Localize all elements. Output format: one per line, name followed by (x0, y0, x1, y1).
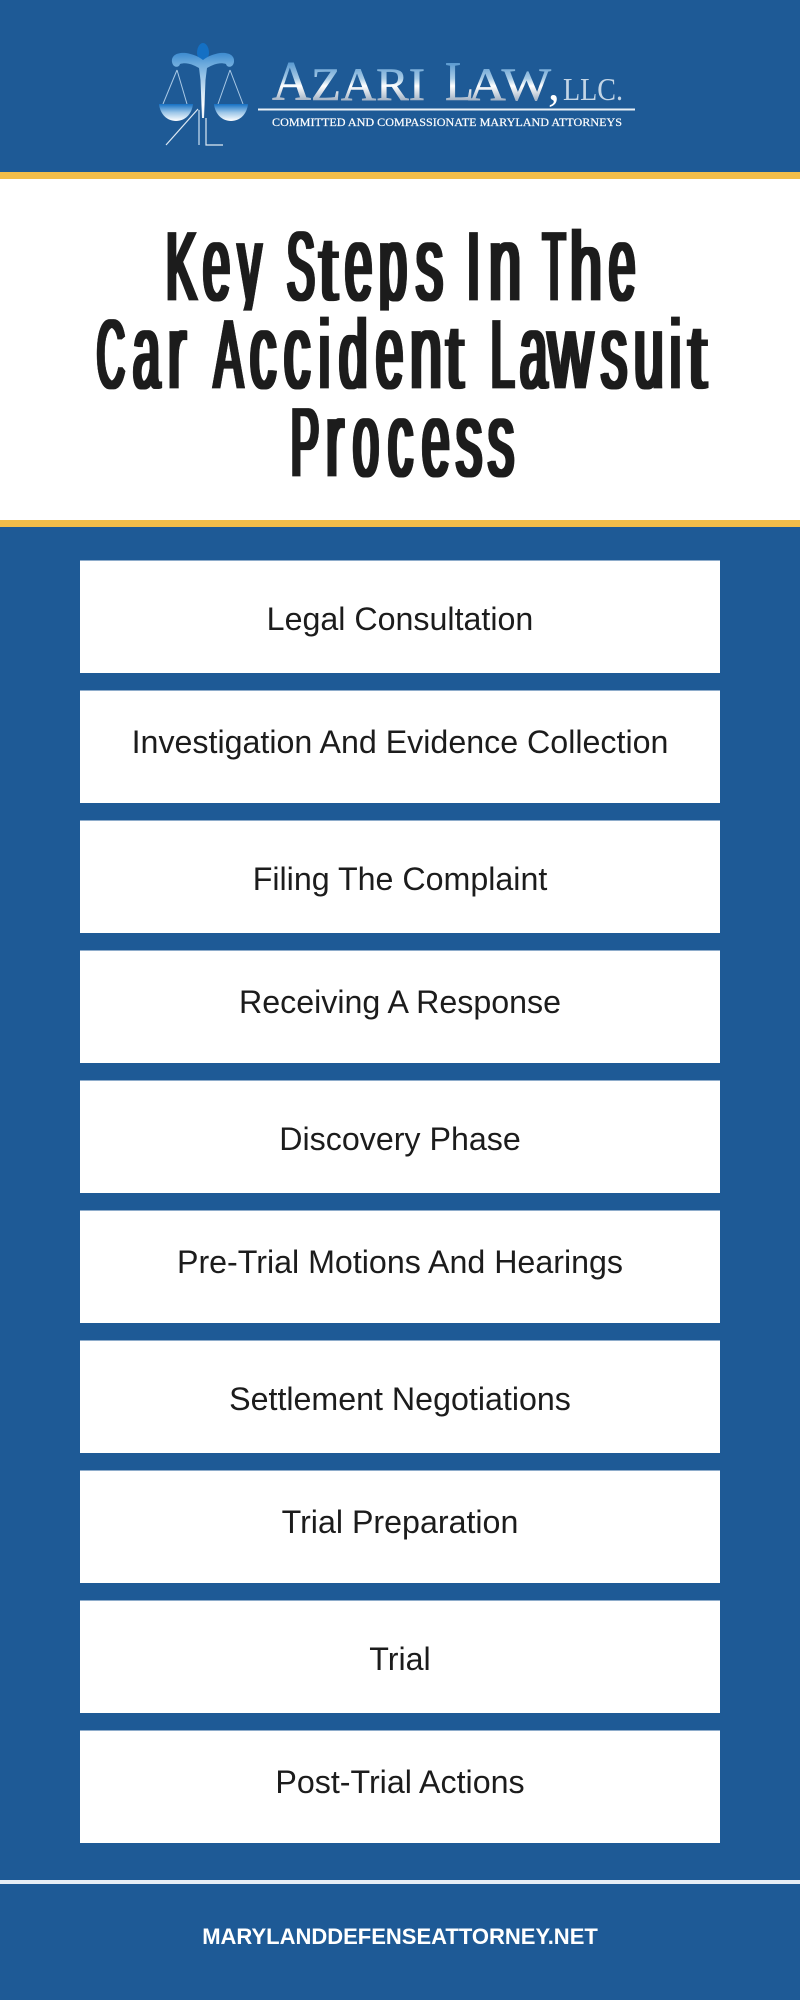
title text: e (609, 203, 635, 323)
step 8 (80, 1470, 720, 1583)
title text: e (345, 203, 372, 323)
title text: c (250, 291, 276, 411)
title text: e (376, 291, 403, 411)
title text: n (489, 203, 521, 323)
step 2: Investigation And Evidence Collection (132, 724, 668, 760)
step 6 (80, 1210, 720, 1323)
title text: C (97, 299, 125, 409)
title text: e (422, 379, 449, 499)
step 1: Legal Consultation (267, 601, 533, 637)
step 3: Filing The Complaint (253, 861, 547, 897)
step 7: Settlement Negotiations (229, 1381, 571, 1417)
title text: p (379, 203, 407, 323)
title text: y (238, 203, 261, 323)
title text: o (353, 379, 378, 499)
title text: e (203, 203, 230, 323)
logo wordmark: A (272, 51, 312, 113)
title text: t (446, 305, 464, 407)
title text: r (168, 291, 186, 411)
title text: t (319, 217, 338, 319)
step 3 (80, 820, 720, 933)
step 5: Discovery Phase (279, 1121, 521, 1157)
title text: a (133, 291, 160, 411)
step 5 (80, 1080, 720, 1193)
title text: s (601, 291, 627, 411)
title text: L (491, 299, 514, 409)
title text: S (287, 211, 315, 321)
logo tagline: COMMITTED AND COMPASSIONATE MARYLAND ATTORNEYS (272, 115, 622, 129)
title text: A (214, 299, 243, 409)
title text: t (688, 305, 707, 407)
step 6: Pre-Trial Motions And Hearings (177, 1244, 623, 1280)
step 8: Trial Preparation (282, 1504, 518, 1540)
title text: r (326, 379, 343, 499)
title text: s (488, 379, 514, 499)
title text: n (410, 291, 442, 411)
title text: d (339, 299, 367, 409)
step 1 (80, 560, 720, 673)
logo wordmark: LLC. (563, 71, 623, 107)
title text: u (634, 291, 664, 411)
step 7 (80, 1340, 720, 1453)
step 10 (80, 1730, 720, 1843)
title text: i (319, 299, 330, 409)
title text: T (543, 211, 565, 321)
title text: s (416, 203, 443, 323)
title text: i (670, 299, 681, 409)
step 10: Post-Trial Actions (275, 1764, 525, 1800)
step 9 (80, 1600, 720, 1713)
title text: h (570, 211, 602, 321)
title text: K (166, 211, 197, 321)
title text: c (388, 379, 413, 499)
logo wordmark: ZARI (311, 59, 425, 111)
header logo: Azari Law, LLC (159, 43, 635, 146)
step 2 (80, 690, 720, 803)
title text: I (466, 211, 479, 321)
title text: P (291, 387, 319, 497)
logo wordmark: L (445, 51, 474, 113)
title text: a (520, 291, 547, 411)
logo wordmark: AW (468, 59, 552, 111)
title text: s (456, 379, 482, 499)
logo wordmark (272, 51, 623, 113)
logo wordmark: , (548, 59, 560, 111)
step 9: Trial (369, 1641, 431, 1677)
icon: scales of justice (159, 43, 248, 145)
title text (96, 203, 708, 499)
step 4: Receiving A Response (239, 984, 561, 1020)
step 4 (80, 950, 720, 1063)
title text: c (284, 291, 310, 411)
title panel (0, 172, 800, 527)
title text: w (548, 291, 592, 411)
footer website: MARYLANDDEFENSEATTORNEY.NET (202, 1924, 598, 1949)
